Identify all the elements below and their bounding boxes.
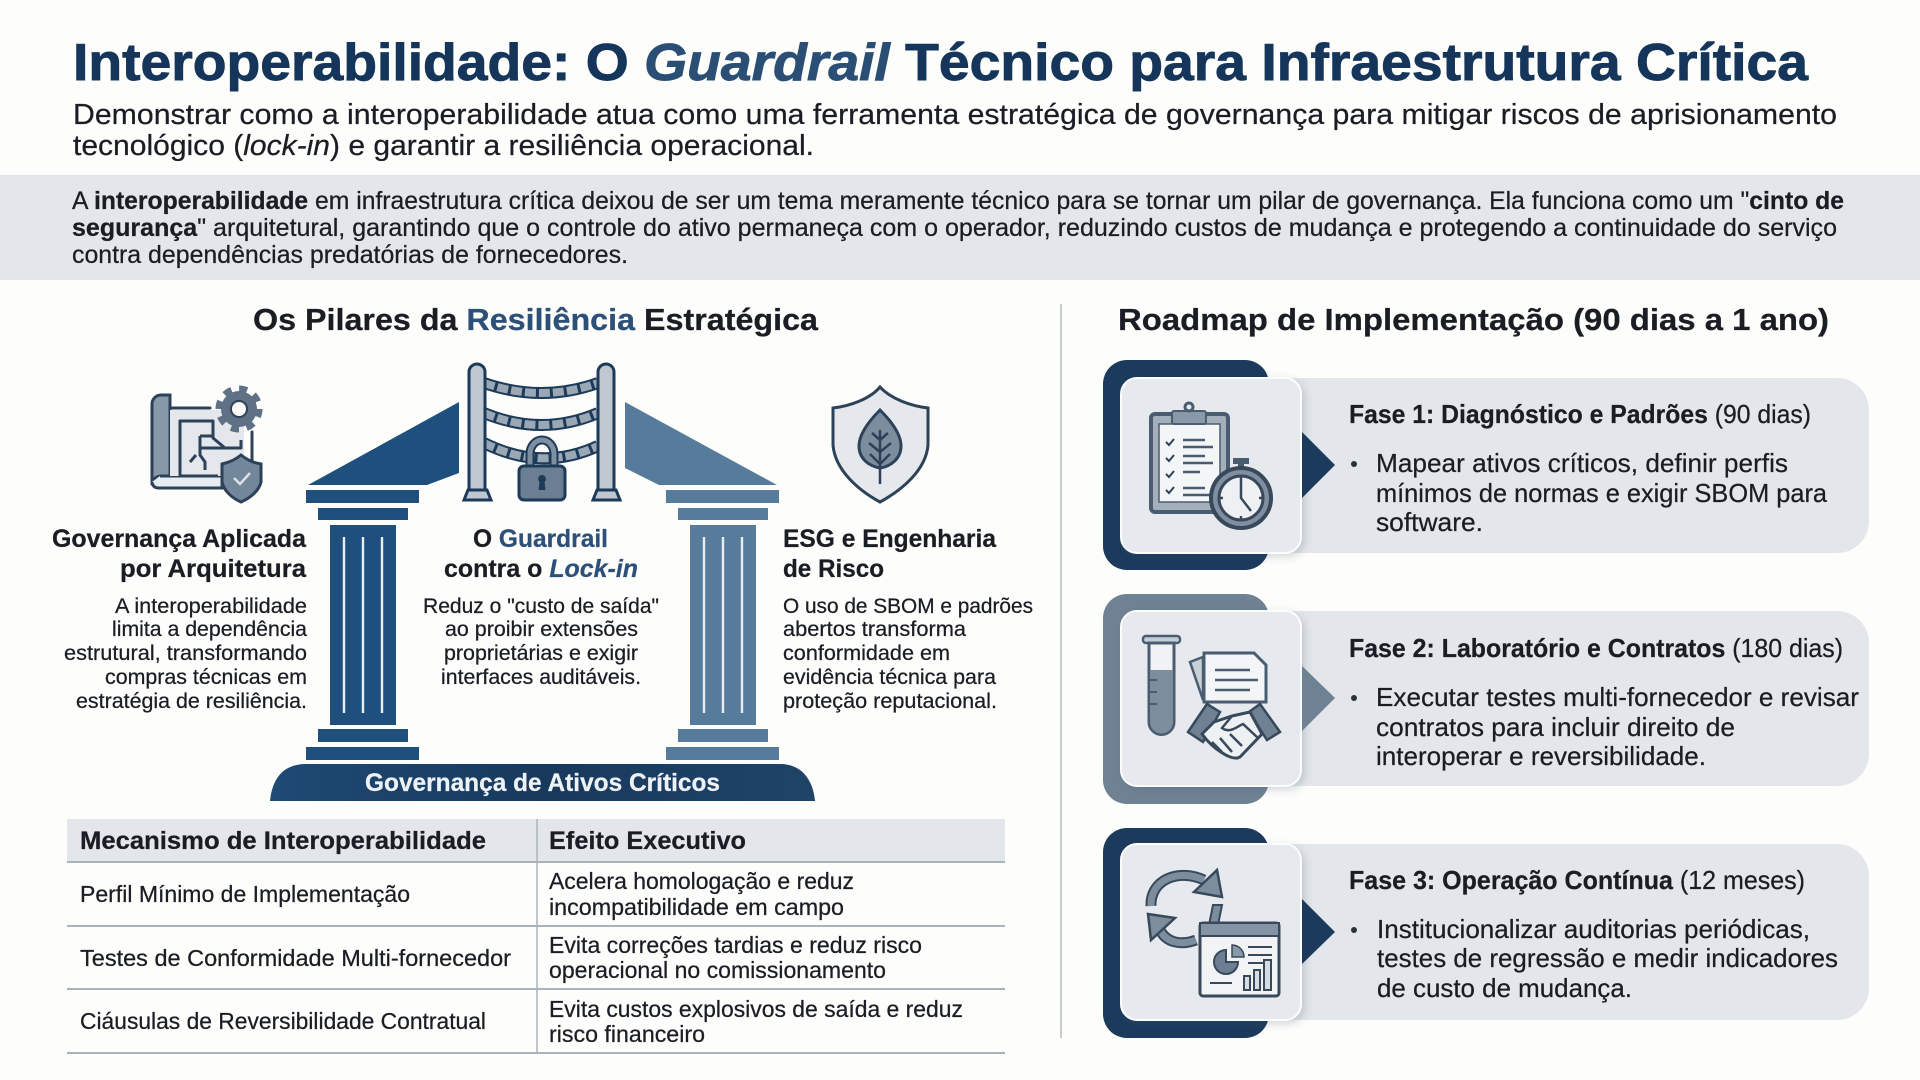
base bar	[270, 764, 815, 801]
table row 2: operacional no comissionamento	[549, 957, 886, 983]
phase 2 text: contratos para incluir direito de	[1376, 712, 1735, 742]
right roof	[625, 402, 777, 485]
left pillar	[306, 490, 419, 760]
intro band: A interoperabilidade em infraestrutura crítica deixou de ser um tema meramente técnico para se tornar um pilar de governança. Ela funciona como um "cinto de	[72, 187, 1844, 215]
pillar text: guardrail: interfaces auditáveis.	[441, 666, 641, 689]
arrow	[1302, 666, 1335, 731]
pillar text: guardrail: O Guardrail	[473, 525, 608, 553]
pillar text: guardrail: Reduz o "custo de saída"	[423, 595, 659, 618]
phase 2	[1103, 594, 1869, 804]
icon: shield with leaf	[833, 387, 928, 502]
pillar text: ESG: conformidade em	[783, 642, 950, 665]
pillar text: governança: estrutural, transformando	[64, 642, 307, 665]
table row 1: Perfil Mínimo de Implementação	[80, 881, 410, 907]
heading: roadmap: Roadmap de Implementação (90 dias a 1 ano)	[1118, 302, 1829, 337]
intro band	[0, 175, 1920, 280]
pillar text: guardrail	[423, 525, 659, 689]
intro band: contra dependências predatórias de fornecedores.	[72, 241, 628, 269]
phase 1	[1103, 360, 1869, 570]
pillar text: governança	[52, 525, 307, 713]
phase 3 text: Fase 3: Operação Contínua (12 meses)	[1349, 865, 1805, 895]
table header	[80, 827, 746, 855]
phase 3 text: de custo de mudança.	[1377, 973, 1632, 1003]
subtitle	[73, 99, 1837, 162]
table row 2: Testes de Conformidade Multi-fornecedor	[80, 945, 511, 971]
phase 2 text: Fase 2: Laboratório e Contratos (180 dias)	[1349, 633, 1843, 663]
pillar text: ESG	[783, 525, 1033, 713]
guardrail with ropes and lock	[464, 364, 620, 500]
phase 2 text: interoperar e reversibilidade.	[1376, 741, 1706, 771]
pillar text: governança: compras técnicas em	[105, 666, 307, 689]
pillar text: ESG: O uso de SBOM e padrões	[783, 595, 1033, 618]
pillar text: governança: por Arquitetura	[120, 555, 307, 583]
subtitle: Demonstrar como a interoperabilidade atua como uma ferramenta estratégica de governança para mitigar riscos de aprisionamento	[73, 99, 1837, 131]
intro band: segurança" arquitetural, garantindo que o controle do ativo permaneça com o operador, reduzindo custos de mudança e protegendo a continuidade do serviço	[72, 214, 1837, 242]
arrow	[1302, 432, 1335, 498]
phase 3 text	[1349, 865, 1838, 1003]
pillar text: ESG: ESG e Engenharia	[783, 525, 997, 553]
title: Interoperabilidade: O Guardrail Técnico para Infraestrutura Crítica	[73, 34, 1809, 92]
pillar text: guardrail: proprietárias e exigir	[444, 642, 638, 665]
pillar text: governança: estratégia de resiliência.	[76, 690, 307, 713]
table header: Efeito Executivo	[549, 827, 746, 855]
phase 1 text: software.	[1376, 507, 1483, 537]
base bar label: Governança de Ativos Críticos	[365, 769, 720, 797]
pillar text: ESG: evidência técnica para	[783, 666, 996, 689]
phase 1 text: Fase 1: Diagnóstico e Padrões (90 dias)	[1349, 399, 1811, 429]
pillar text: governança: A interoperabilidade	[115, 595, 307, 618]
table row 3: Evita custos explosivos de saída e reduz	[549, 996, 963, 1022]
table	[67, 819, 1005, 1053]
icon: blueprint with gear and shield	[152, 389, 261, 502]
table row 1: Acelera homologação e reduz	[549, 868, 854, 894]
table row 2: Evita correções tardias e reduz risco	[549, 932, 922, 958]
temple diagram	[270, 364, 815, 801]
phase 3 text: Institucionalizar auditorias periódicas,	[1377, 914, 1810, 944]
icon: clipboard and stopwatch	[1151, 403, 1271, 528]
table row 1: incompatibilidade em campo	[549, 894, 844, 920]
pillar text: governança: Governança Aplicada	[52, 525, 307, 553]
pillar text: guardrail: ao proibir extensões	[445, 618, 638, 641]
pillar text: guardrail: contra o Lock-in	[444, 555, 638, 583]
phase 3 text: testes de regressão e medir indicadores	[1377, 943, 1838, 973]
table row 1	[80, 868, 854, 920]
icon: test tube, document and handshake	[1143, 636, 1280, 758]
pillar text: ESG: abertos transforma	[783, 618, 966, 641]
table header: Mecanismo de Interoperabilidade	[80, 827, 486, 855]
table row 3	[80, 996, 963, 1047]
table row 3: risco financeiro	[549, 1021, 705, 1047]
right pillar	[666, 490, 779, 760]
pillar text: ESG: proteção reputacional.	[783, 690, 997, 713]
phase 1 text	[1349, 399, 1828, 537]
table row 3: Ciáusulas de Reversibilidade Contratual	[80, 1008, 486, 1034]
pillar text: ESG: de Risco	[783, 555, 884, 583]
subtitle: tecnológico (lock-in) e garantir a resiliência operacional.	[73, 130, 814, 162]
left roof	[308, 402, 459, 485]
phase 1 text: Mapear ativos críticos, definir perfis	[1376, 448, 1788, 478]
phase 1 text: mínimos de normas e exigir SBOM para	[1376, 478, 1828, 508]
arrow	[1302, 899, 1335, 964]
table row 2	[80, 932, 922, 983]
phase 2 text	[1349, 633, 1859, 771]
phase 3	[1103, 828, 1869, 1038]
pillar text: governança: limita a dependência	[112, 618, 307, 641]
heading: pilares: Os Pilares da Resiliência Estratégica	[253, 302, 819, 337]
icon: cycle arrows and dashboard	[1148, 870, 1279, 996]
phase 2 text: Executar testes multi-fornecedor e revisar	[1376, 682, 1859, 712]
